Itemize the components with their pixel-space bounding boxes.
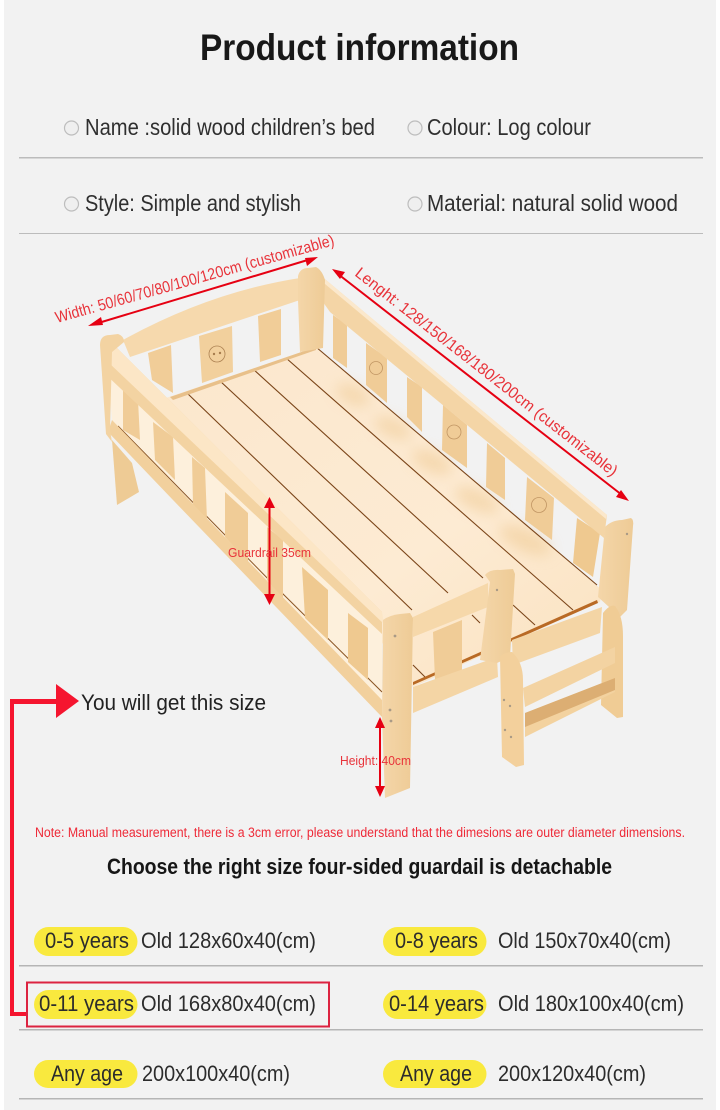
size: 0-8 years: Old 150x70x40(cm) xyxy=(498,928,671,953)
fasteners xyxy=(389,533,628,722)
arrow: guardrail height xyxy=(264,497,275,605)
size: 0-14 years xyxy=(383,990,684,1019)
title: Product information xyxy=(200,27,519,68)
arrow: connector to highlighted size xyxy=(10,684,79,1016)
label: height: Height: 40cm xyxy=(340,753,411,768)
size: 0-11 years highlighted xyxy=(27,982,329,1026)
label: length: Lenght: 128/150/168/180/200cm (customizable) xyxy=(352,265,620,480)
callout: You will get this size xyxy=(81,690,266,715)
illustration: wooden children's bed xyxy=(100,267,633,798)
attribute: colour: Colour: Log colour xyxy=(427,114,591,140)
size: 0-14 years: 0-14 years xyxy=(389,991,484,1016)
near side guardrail xyxy=(100,334,384,717)
size: any age 200x120: Any age xyxy=(400,1061,472,1086)
size: 0-14 years: Old 180x100x40(cm) xyxy=(498,991,684,1016)
size: 0-8 years: 0-8 years xyxy=(395,928,478,953)
attribute: name: Name :solid wood children’s bed xyxy=(85,114,375,140)
arrow: leg height xyxy=(375,717,385,797)
size: 0-5 years: 0-5 years xyxy=(45,928,129,953)
label: guardrail: Guardrail 35cm xyxy=(228,545,311,560)
headboard xyxy=(123,267,325,393)
attribute: material: Material: natural solid wood xyxy=(427,190,678,216)
arrow: length xyxy=(332,269,629,501)
size: any age 200x100: 200x100x40(cm) xyxy=(142,1061,290,1086)
bed platform xyxy=(160,347,602,687)
panel: product attributes xyxy=(19,114,703,234)
size: 0-5 years xyxy=(34,927,316,956)
label: width: Width: 50/60/70/80/100/120cm (customizable) xyxy=(53,232,336,327)
size: any age 200x100 xyxy=(34,1060,290,1088)
size: any age 200x100: Any age xyxy=(51,1061,123,1086)
fasteners xyxy=(503,699,512,738)
carved motif xyxy=(209,346,225,362)
far side guardrail xyxy=(318,275,607,577)
size: any age 200x120 xyxy=(383,1060,646,1088)
size: 0-11 years highlighted: Old 168x80x40(cm) xyxy=(141,991,316,1016)
size: 0-11 years highlighted: 0-11 years xyxy=(39,991,134,1016)
size: 0-5 years: Old 128x60x40(cm) xyxy=(141,928,316,953)
arrow: width xyxy=(88,257,318,326)
attribute: style: Style: Simple and stylish xyxy=(85,190,301,216)
carved motifs xyxy=(370,362,546,512)
foot board xyxy=(382,518,633,798)
ladder xyxy=(500,606,623,767)
size: any age 200x120: 200x120x40(cm) xyxy=(498,1061,646,1086)
size heading: Choose the right size four-sided guardail is detachable xyxy=(107,854,612,879)
size: 0-8 years xyxy=(383,927,671,956)
panel: size table xyxy=(19,927,703,1100)
